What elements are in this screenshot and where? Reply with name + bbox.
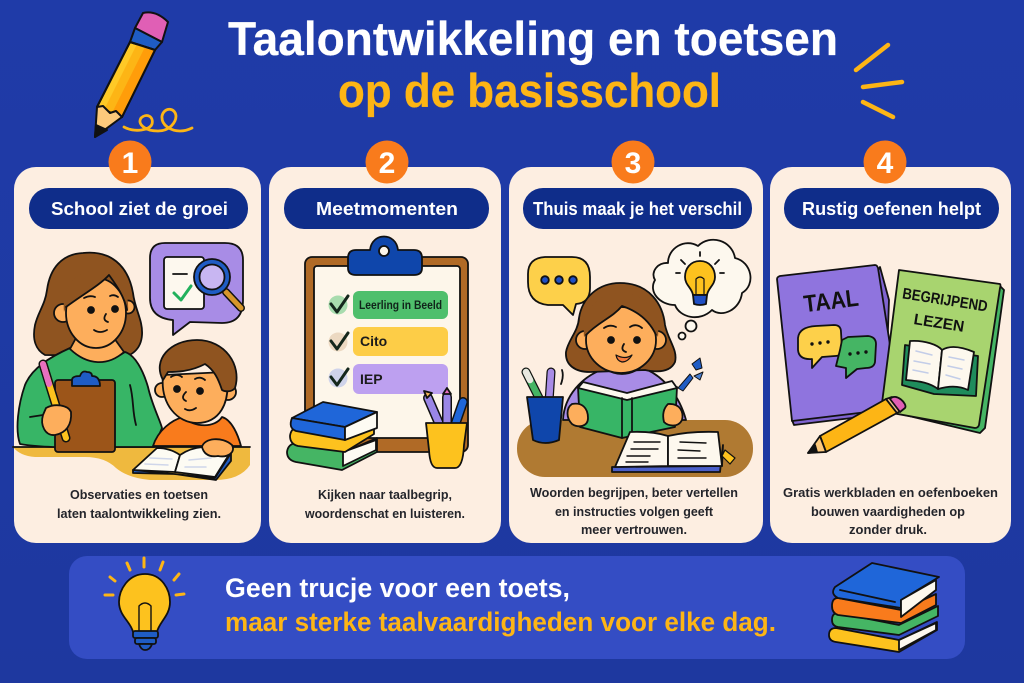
- checklist row: IEP: [328, 364, 448, 394]
- description: [530, 485, 738, 537]
- heading: [523, 188, 752, 229]
- description: Gratis werkbladen en oefenboeken: [783, 485, 998, 500]
- girl hair back: [566, 283, 676, 372]
- table: [517, 420, 753, 477]
- step number 3: 3: [625, 147, 641, 180]
- teacher neck: [70, 338, 124, 362]
- teacher pencil: [43, 364, 66, 438]
- checklist row: Leerling in Beeld: Leerling in Beeld: [359, 300, 442, 312]
- boy hair: [160, 340, 237, 391]
- stack of books: [287, 438, 377, 470]
- heading: Meetmomenten: [316, 198, 458, 219]
- step number 4: [864, 140, 906, 184]
- panel: card 1: [13, 140, 261, 543]
- speech bubble with magnifier: [150, 243, 243, 335]
- open book on table: [612, 445, 723, 472]
- blue pencil cup: [526, 372, 551, 402]
- title: [228, 12, 838, 117]
- description: bouwen vaardigheden op: [811, 504, 965, 519]
- thought cloud: [653, 240, 750, 317]
- clipboard: [305, 257, 468, 452]
- teacher face: [54, 304, 72, 322]
- heading: Thuis maak je het verschil: [533, 198, 742, 219]
- description: zonder druk.: [849, 522, 927, 537]
- pencil cup: [428, 397, 463, 428]
- green workbook BEGRIJPEND LEZEN: [881, 270, 1004, 433]
- sparkle lines: [856, 45, 902, 117]
- green book: [578, 387, 677, 438]
- icon: stack of books: [829, 563, 939, 652]
- title: op de basisschool: [338, 64, 721, 117]
- open book on cover: [902, 345, 978, 396]
- icon: pencil top left: [95, 12, 168, 137]
- heading: Rustig oefenen helpt: [802, 198, 981, 219]
- description: laten taalontwikkeling zien.: [57, 506, 221, 521]
- step number 2: 2: [379, 147, 395, 180]
- girl body: [563, 367, 686, 420]
- teacher hand: [42, 405, 71, 435]
- description: Woorden begrijpen, beter vertellen: [530, 485, 738, 500]
- panel: card 4: [770, 140, 1011, 543]
- illustration: workbooks and pencil: [777, 265, 1004, 453]
- heading: School ziet de groei: [51, 198, 228, 219]
- speech bubble: [528, 257, 590, 315]
- description: [57, 487, 221, 521]
- description: [304, 487, 465, 521]
- heading: [29, 188, 248, 229]
- illustration: clipboard checklist: [287, 236, 468, 470]
- purple workbook TAAL: TAAL: [802, 285, 860, 318]
- clipboard: [55, 380, 115, 452]
- girl neck: [604, 362, 640, 374]
- teacher sweater: [18, 348, 162, 447]
- step number 3: [612, 140, 654, 184]
- hands: [568, 404, 588, 426]
- description: woordenschat en luisteren.: [304, 506, 465, 521]
- heading: [284, 188, 489, 229]
- checklist row: Cito: [328, 327, 448, 356]
- pencil: [808, 397, 905, 453]
- banner text: maar sterke taalvaardigheden voor elke dag.: [225, 607, 776, 637]
- illustration: teacher and boy: [13, 243, 250, 480]
- green workbook BEGRIJPEND LEZEN: BEGRIJPEND: [901, 285, 989, 316]
- teacher hair: [34, 253, 142, 356]
- title: Taalontwikkeling en toetsen: [228, 12, 838, 65]
- banner text: Geen trucje voor een toets,: [225, 573, 570, 603]
- girl face: [576, 331, 594, 349]
- panel: card 3: [509, 140, 763, 543]
- step number 2: [366, 140, 408, 184]
- squiggle: [124, 109, 192, 131]
- panel: bottom banner: [69, 556, 965, 659]
- panel: card 2: [269, 140, 501, 543]
- checklist row: IEP: IEP: [360, 371, 383, 387]
- purple workbook TAAL: [777, 265, 890, 425]
- broken crayon: [678, 374, 693, 391]
- description: Observaties en toetsen: [70, 487, 208, 502]
- description: en instructies volgen geeft: [555, 504, 714, 519]
- lightbulb in cloud: [685, 261, 715, 295]
- description: [783, 485, 998, 537]
- small crayon stub: [722, 450, 735, 464]
- boy face: [155, 383, 169, 397]
- table: [13, 447, 250, 480]
- heading: [784, 188, 999, 229]
- banner text: [225, 573, 776, 637]
- description: meer vertrouwen.: [581, 522, 687, 537]
- open book: [133, 453, 231, 480]
- green workbook BEGRIJPEND LEZEN: LEZEN: [912, 311, 965, 336]
- illustration: girl reading: [517, 240, 753, 477]
- description: Kijken naar taalbegrip,: [318, 487, 452, 502]
- checklist row: Cito: Cito: [360, 333, 387, 349]
- step number 4: 4: [877, 147, 894, 180]
- step number 1: [108, 140, 152, 184]
- step number 1: 1: [122, 147, 138, 180]
- speech bubbles: [798, 325, 842, 368]
- checklist row: Leerling in Beeld: [328, 291, 448, 319]
- icon: lightbulb: [105, 558, 184, 650]
- boy shirt: [153, 417, 241, 446]
